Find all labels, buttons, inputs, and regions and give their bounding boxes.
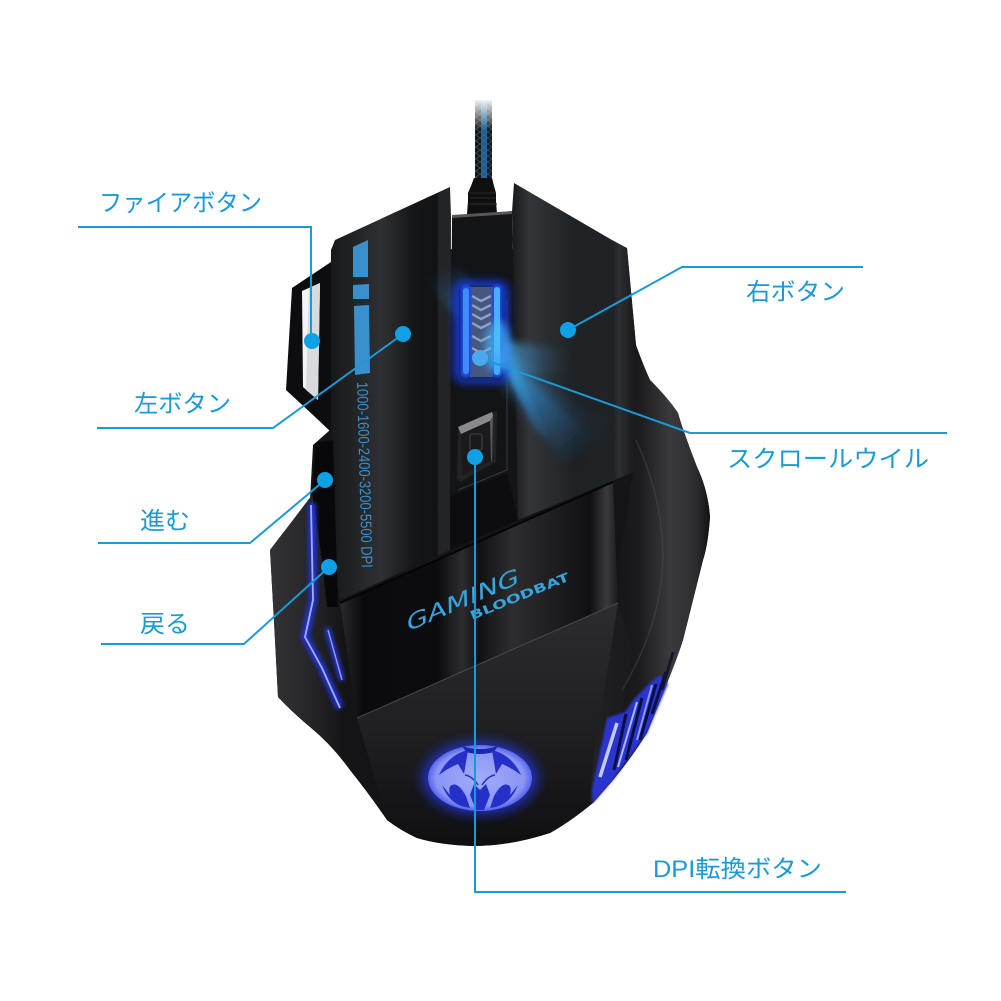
mouse cable bbox=[467, 98, 497, 214]
right grip bbox=[600, 347, 710, 760]
gaming band bbox=[340, 482, 618, 718]
icon: gaming mouse bbox=[270, 98, 710, 846]
palm rest bbox=[357, 603, 618, 846]
callout: back: 戻る bbox=[140, 611, 190, 638]
callout: DPI switch: DPI転換ボタン bbox=[653, 856, 822, 883]
callout: fire button: ファイアボタン bbox=[99, 190, 262, 217]
DPI range text: 1000-1600-2400-3200-5500 DPI bbox=[353, 382, 375, 568]
scroll wheel with glow bbox=[420, 268, 610, 475]
mouse body base bbox=[270, 248, 710, 846]
callout: back bbox=[101, 559, 337, 644]
callout: left button bbox=[97, 326, 411, 428]
DPI button bbox=[457, 412, 497, 482]
icon: glowing bat emblem bbox=[422, 741, 538, 815]
callout: fire button bbox=[78, 190, 320, 349]
callout: forward bbox=[98, 472, 333, 543]
bloodbat logo text: BLOODBAT bbox=[468, 570, 573, 623]
gaming logo text: GAMING bbox=[406, 564, 519, 638]
blue strips on left button bbox=[353, 240, 370, 375]
lower center panel bbox=[450, 473, 518, 550]
callout: right button bbox=[560, 267, 863, 338]
left side panel bbox=[270, 495, 417, 838]
left side lights bbox=[305, 503, 342, 708]
callout: forward: 進む bbox=[140, 508, 190, 535]
right side vents bbox=[592, 652, 673, 803]
callout: scroll wheel: スクロールウイル bbox=[727, 446, 929, 473]
callout: right button: 右ボタン bbox=[746, 279, 845, 306]
fire button bbox=[286, 262, 331, 432]
callout: DPI switch bbox=[467, 449, 846, 892]
center channel bbox=[450, 212, 517, 497]
left button bbox=[331, 187, 451, 600]
callout: left button: 左ボタン bbox=[134, 391, 231, 418]
right button bbox=[512, 183, 636, 520]
callout: scroll wheel bbox=[472, 350, 947, 473]
side buttons bbox=[313, 440, 338, 607]
